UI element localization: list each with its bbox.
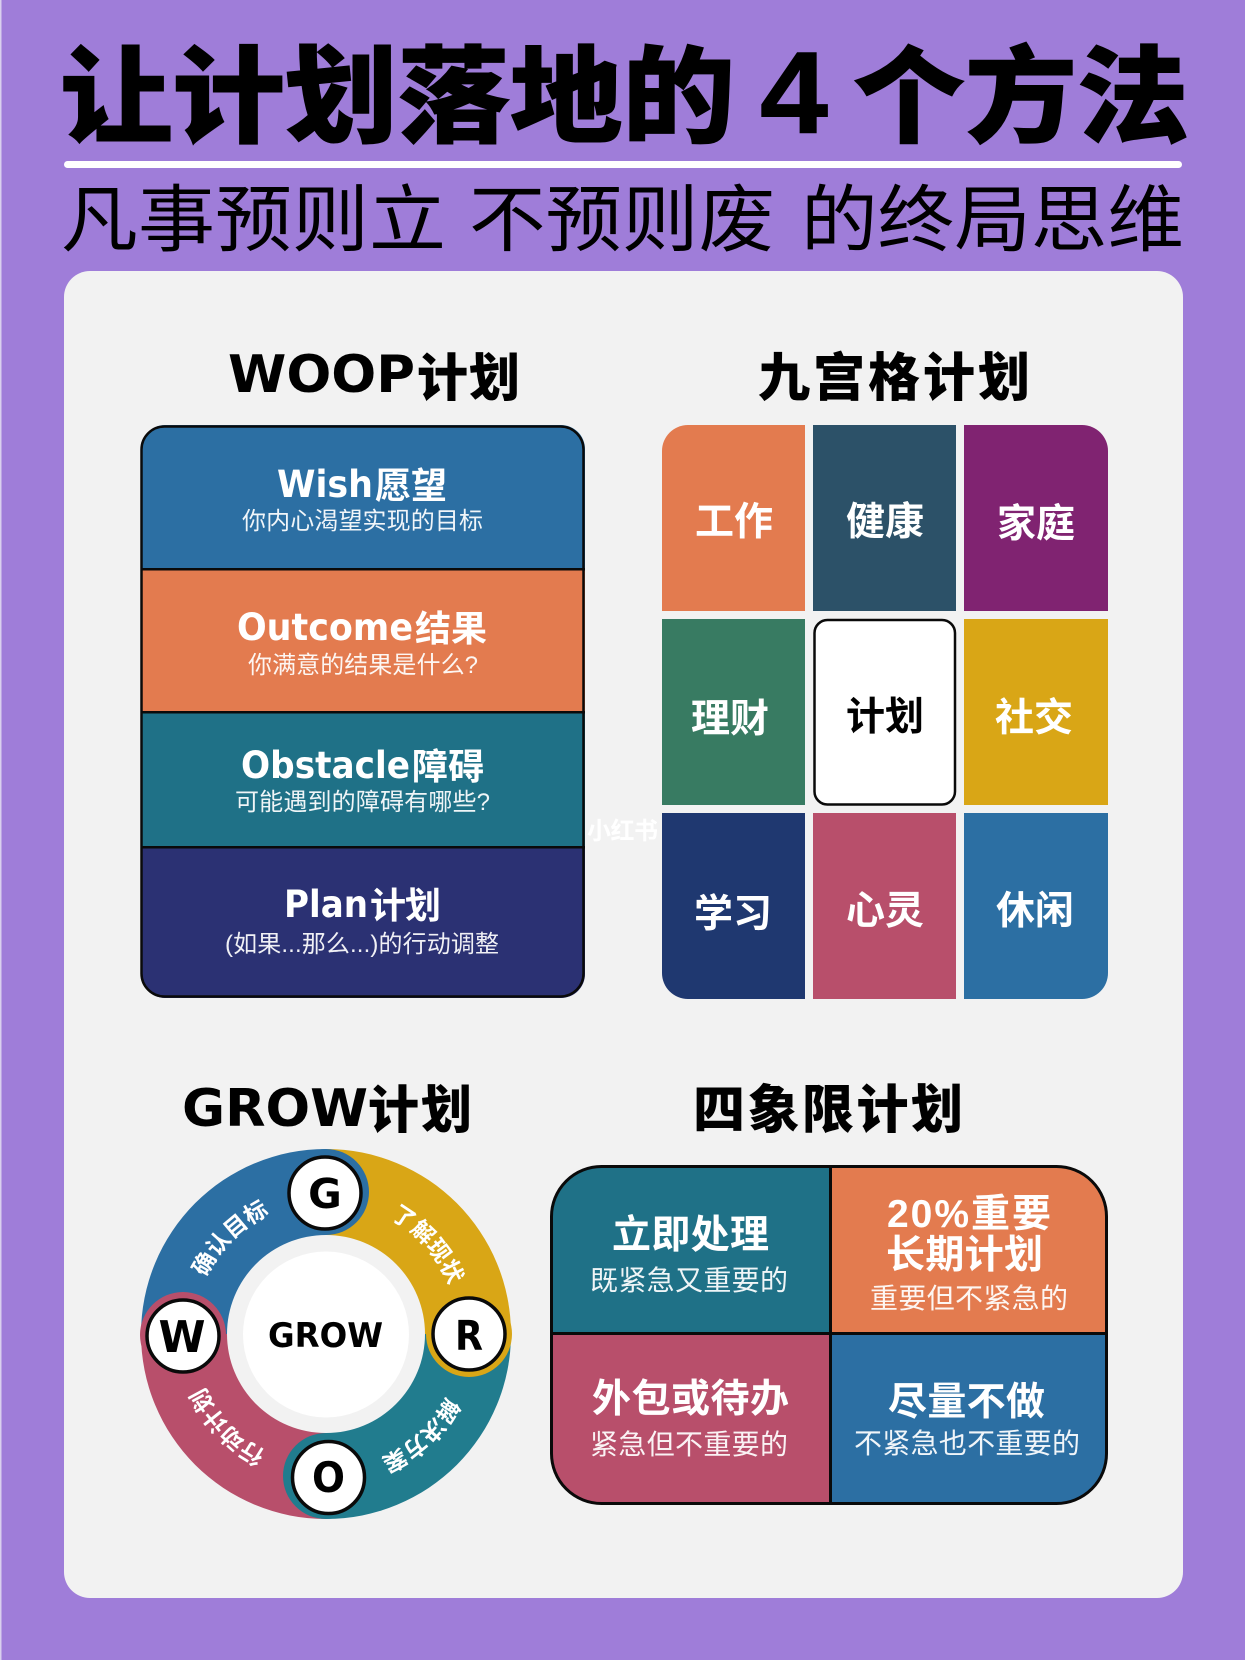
- heading: WOOP: [228, 345, 520, 407]
- badge: W: W: [158, 1312, 206, 1363]
- title: 个方法: [853, 40, 1189, 157]
- ring segment: W rose: [141, 1334, 326, 1519]
- quadrant: long-term: 20%重要: [887, 1193, 1051, 1236]
- subtitle: 的终局思维: [801, 180, 1184, 261]
- heading: quadrant: 四象限计划: [693, 1082, 963, 1140]
- grid labels: 学习: [694, 893, 772, 936]
- subtitle: 凡事预则立: [61, 180, 446, 261]
- row: Outcome: 你满意的结果是什么?: [248, 652, 478, 679]
- heading: WOOP: WOOP: [228, 345, 415, 405]
- quadrant: long-term: 长期计划: [886, 1234, 1043, 1277]
- row: Wish: Wish: [277, 463, 373, 506]
- panel: WOOP plan: [141, 345, 585, 998]
- quadrant: avoid: [854, 1381, 1080, 1459]
- panel: GROW plan: [140, 1079, 512, 1519]
- row: Plan: (如果...那么...)的行动调整: [225, 931, 499, 958]
- ring caps: [140, 1149, 512, 1519]
- grid labels: 社交: [995, 697, 1073, 740]
- row: Outcome: [237, 606, 487, 679]
- row: Wish: 你内心渴望实现的目标: [242, 508, 483, 535]
- grid labels: 健康: [846, 501, 924, 544]
- stacked rows: [141, 425, 585, 998]
- quadrant: do now: 立即处理: [612, 1214, 769, 1257]
- quadrant: delegate: 外包或待办: [592, 1378, 789, 1421]
- center cell: [814, 620, 955, 804]
- ring labels: 行动计划: [188, 1388, 264, 1466]
- row: Wish: [242, 463, 483, 535]
- row: Outcome: Outcome: [237, 606, 413, 649]
- center circle: GROW: [268, 1316, 383, 1356]
- quadrant: delegate: 紧急但不重要的: [590, 1429, 788, 1460]
- heading: GROW: [182, 1079, 472, 1139]
- title: [60, 28, 1189, 158]
- grid labels: 计划: [846, 696, 924, 739]
- badge: G: G: [308, 1170, 342, 1218]
- quadrant: do now: 既紧急又重要的: [590, 1265, 788, 1296]
- heading: GROW: 计划: [368, 1082, 472, 1139]
- title: 4: [760, 28, 828, 158]
- badge: G: [289, 1157, 361, 1229]
- row: Plan: 计划: [370, 885, 441, 926]
- subtitle: 不预则废: [469, 180, 775, 261]
- heading: nine-grid: 九宫格计划: [758, 350, 1030, 408]
- ring labels: [188, 1199, 465, 1474]
- ring labels: 解决方案: [382, 1396, 462, 1474]
- grid labels: 理财: [691, 698, 769, 741]
- badge: R: [433, 1298, 505, 1370]
- ring segment: G blue: [141, 1149, 326, 1334]
- row: Wish: 愿望: [375, 465, 447, 506]
- grid cells: [662, 425, 1108, 999]
- quadrant cells: [551, 1166, 1107, 1504]
- quadrant: long-term: 重要但不紧急的: [870, 1283, 1068, 1314]
- grid labels: 工作: [695, 501, 773, 544]
- center circle: [243, 1252, 409, 1418]
- badge: W: [147, 1300, 219, 1372]
- grid labels: 家庭: [997, 503, 1075, 546]
- ring labels: 了解现状: [394, 1204, 465, 1285]
- ring segment: O teal: [326, 1334, 511, 1519]
- ring labels: 确认目标: [190, 1199, 269, 1276]
- watermark: 小红书: [587, 818, 658, 845]
- quadrant: long-term: [870, 1193, 1068, 1314]
- row: Plan: [225, 883, 499, 958]
- badge: R: R: [455, 1312, 483, 1360]
- row: Outcome: 结果: [415, 608, 487, 649]
- row: Obstacle: [235, 744, 490, 816]
- quadrant: avoid: 不紧急也不重要的: [854, 1428, 1080, 1459]
- grid labels: 休闲: [996, 890, 1074, 933]
- row: Obstacle: 障碍: [412, 746, 484, 787]
- heading: WOOP: 计划: [417, 350, 520, 407]
- title: 让计划落地的: [60, 40, 735, 157]
- badge: O: [292, 1442, 364, 1514]
- quadrant: do now: [590, 1214, 788, 1296]
- row: Obstacle: 可能遇到的障碍有哪些?: [235, 789, 490, 816]
- heading: GROW: GROW: [182, 1079, 368, 1139]
- subtitle: [61, 180, 1184, 261]
- panel: four-quadrant plan: [551, 1082, 1107, 1504]
- grid labels: 心灵: [846, 890, 924, 933]
- main panel: [64, 271, 1183, 1598]
- row: Obstacle: Obstacle: [241, 744, 410, 787]
- title divider line: [64, 161, 1182, 168]
- quadrant: delegate: [590, 1378, 789, 1460]
- ring segment: R gold: [326, 1149, 511, 1334]
- quadrant: avoid: 尽量不做: [888, 1381, 1045, 1424]
- badge: O: O: [312, 1453, 345, 1502]
- row: Plan: Plan: [284, 883, 368, 926]
- panel: nine-grid plan: [662, 350, 1108, 999]
- grid labels: [691, 501, 1075, 936]
